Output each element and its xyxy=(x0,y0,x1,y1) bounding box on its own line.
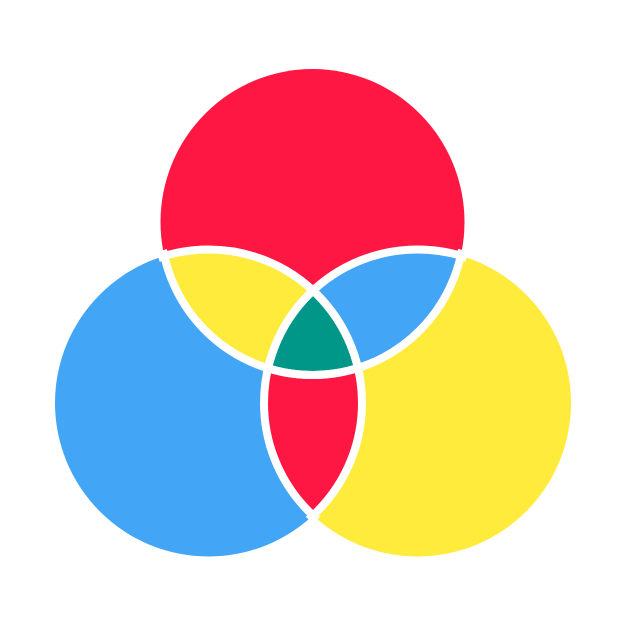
overlap: blue and yellow, red xyxy=(268,373,358,510)
three-circle Venn diagram xyxy=(55,69,571,556)
overlap: red and blue, yellow xyxy=(169,254,307,363)
circle: red top xyxy=(160,69,464,375)
circle: yellow right xyxy=(264,250,571,556)
circle: blue left xyxy=(55,250,362,556)
overlap: centre, green xyxy=(272,296,353,371)
overlap: red and yellow, blue xyxy=(319,254,456,363)
